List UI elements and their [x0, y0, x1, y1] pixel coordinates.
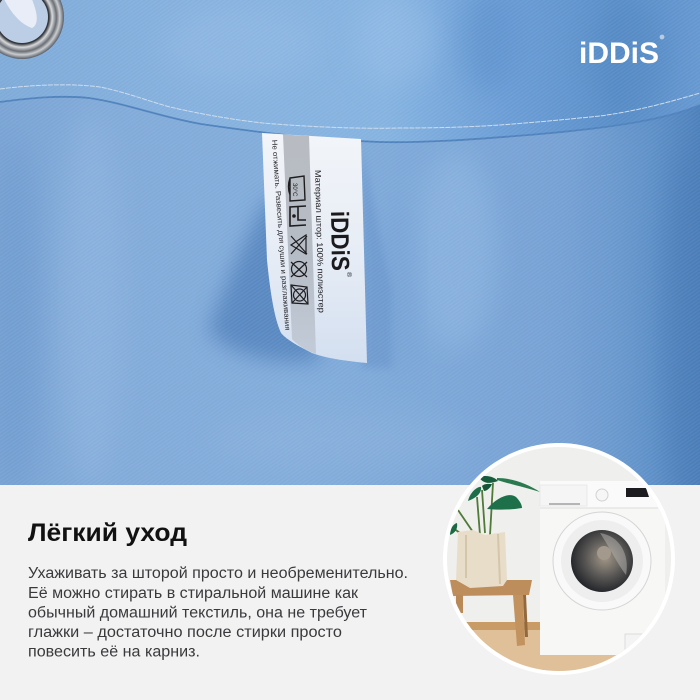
icon: metal curtain grommet with hook [0, 0, 64, 59]
care label [262, 133, 367, 363]
logo: iddis: iDDiS [579, 37, 659, 70]
icon: no bleach [291, 235, 307, 254]
photo circle: washing machine [440, 440, 680, 680]
door ring [553, 512, 651, 610]
canvas bag [456, 530, 507, 588]
icon: no machine dry [291, 285, 308, 304]
body text: повесить её на карниз. [28, 644, 200, 660]
service hatch [625, 634, 642, 650]
label registered mark: ® [345, 272, 353, 278]
wall [447, 447, 671, 622]
label grey strip [283, 134, 316, 354]
door glass [571, 530, 633, 592]
vertical folds of lower curtain [4, 140, 492, 457]
top hem of the curtain [0, 0, 700, 142]
wooden stool [450, 580, 532, 646]
icon: wash 30: 30°C [291, 183, 297, 197]
icon: tumble dry [290, 206, 306, 226]
photo: blue curtain fabric [0, 0, 700, 510]
icon: wash 30 [288, 176, 305, 201]
body text [28, 565, 408, 660]
plant [450, 476, 540, 535]
bottom panel [0, 485, 700, 700]
label material text: Материал штор: 100% полиэстер [313, 170, 327, 313]
display [626, 488, 649, 497]
skirting board [466, 622, 540, 630]
label paper [262, 133, 367, 363]
body text: Её можно стирать в стиральной машине как [28, 585, 358, 602]
body text: Ухаживать за шторой просто и необременительно. [28, 565, 408, 582]
icon: no dry clean [291, 262, 307, 277]
body text: обычный домашний текстиль, она не требует [28, 604, 367, 622]
wooden floor [472, 630, 646, 671]
washing machine body [540, 481, 665, 655]
body text: глажки – достаточно после стирки просто [28, 624, 342, 641]
detergent drawer [540, 485, 587, 506]
label care instructions: Не отжимать. Развесить для сушки и разглаживания [270, 140, 292, 331]
control knob [596, 489, 608, 501]
heading: Лёгкий уход [28, 519, 187, 547]
label brand logo: iDDiS [325, 211, 354, 271]
shadow beneath the care label [208, 150, 392, 368]
